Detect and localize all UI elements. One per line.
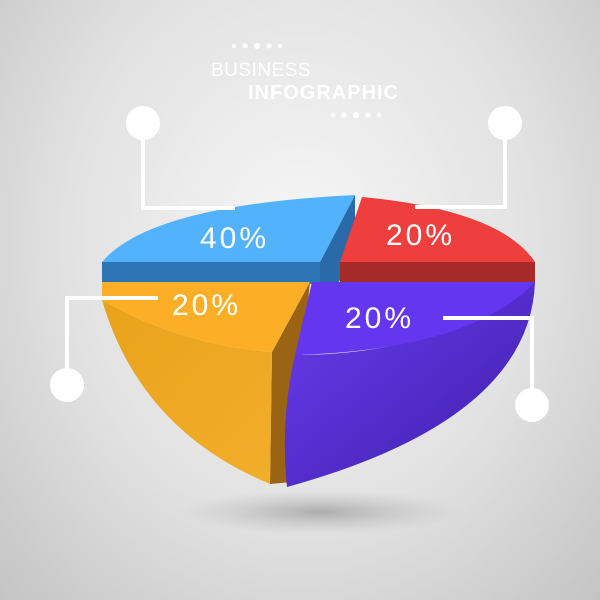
connector: left [50,298,158,402]
slice: red 20% [340,197,535,284]
slice: blue 40% [102,195,355,320]
slice: purple 20% [285,282,535,487]
slice: yellow 20% [102,282,310,484]
slice: yellow 20%: 20% [172,289,241,322]
connector: top-right [415,106,522,207]
slice: red 20%: 20% [386,219,455,252]
connector: top-left [126,106,235,208]
title: BUSINESS [211,60,311,81]
shadow [180,490,460,534]
title [211,43,399,118]
slice: blue 40%: 40% [200,222,269,255]
title: INFOGRAPHIC [248,82,399,104]
connector: right [443,318,549,422]
slice: purple 20%: 20% [345,302,414,335]
